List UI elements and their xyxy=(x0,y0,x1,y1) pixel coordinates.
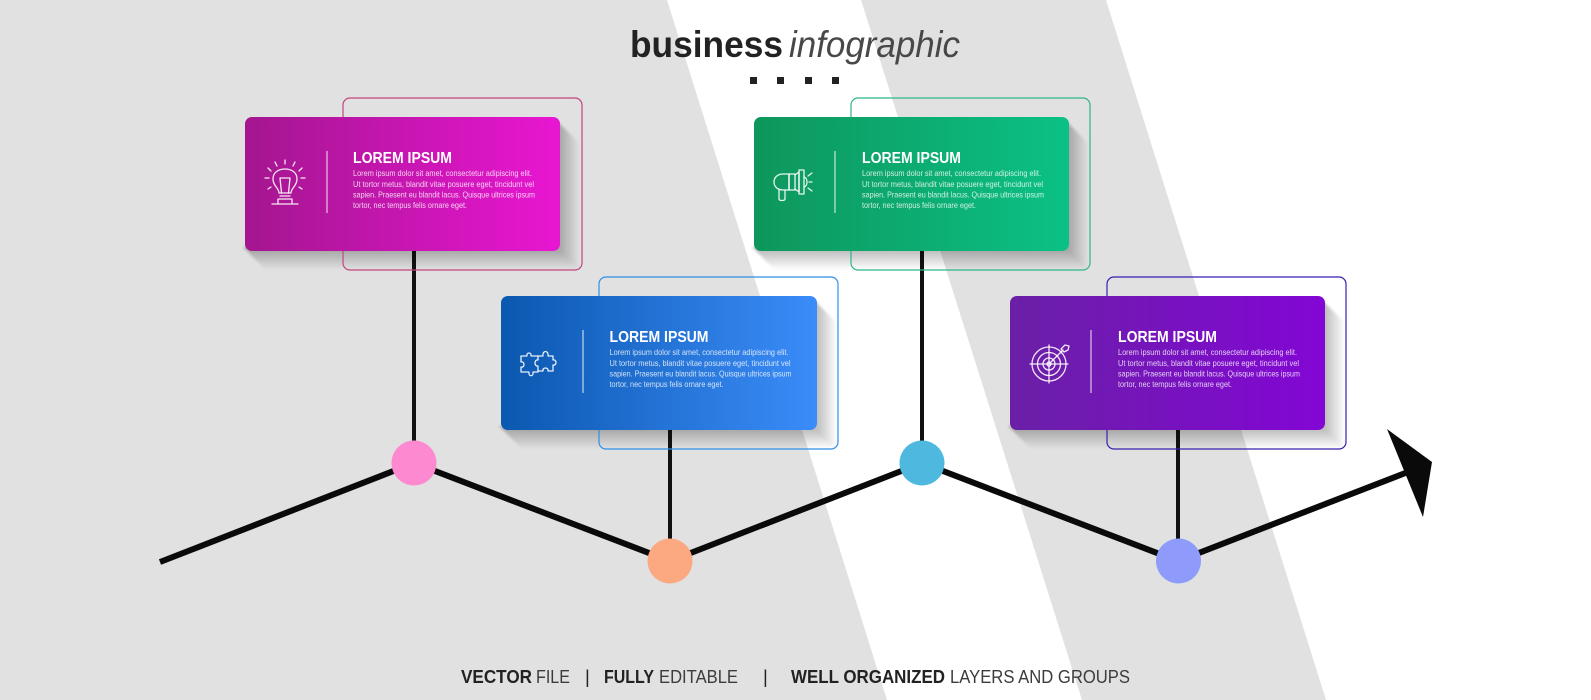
card 3 body text: Ut tortor metus, blandit vitae posuere eget, tincidunt vel xyxy=(862,179,1043,189)
connector: stem 1 xyxy=(412,245,416,463)
card 2 body text: tortor, nec tempus felis ornare eget. xyxy=(610,379,724,389)
card 3 body text: Lorem ipsum dolor sit amet, consectetur adipiscing elit. xyxy=(862,168,1041,178)
card 4 body text: tortor, nec tempus felis ornare eget. xyxy=(1118,379,1232,389)
footer tagline: VECTOR xyxy=(461,666,532,687)
node 3 xyxy=(900,440,944,486)
card 4 body text: Lorem ipsum dolor sit amet, consectetur adipiscing elit. xyxy=(1118,347,1297,357)
footer tagline: | xyxy=(585,666,590,687)
icon: light bulb xyxy=(265,160,305,204)
timeline zigzag line xyxy=(160,463,1408,562)
footer tagline: WELL ORGANIZED xyxy=(791,666,945,687)
card 3 heading: LOREM IPSUM xyxy=(862,150,961,167)
card 4 body text: Ut tortor metus, blandit vitae posuere eget, tincidunt vel xyxy=(1118,358,1299,368)
panel: card 1 xyxy=(243,98,582,270)
connector: stem 3 xyxy=(920,245,924,463)
card 3 body text: sapien. Praesent eu blandit lacus. Quisque ultrices ipsum xyxy=(862,190,1044,200)
card 3 body text xyxy=(862,168,1044,210)
card 2 body text: Lorem ipsum dolor sit amet, consectetur adipiscing elit. xyxy=(610,347,788,357)
card 3 body text: tortor, nec tempus felis ornare eget. xyxy=(862,200,976,210)
title xyxy=(630,24,960,65)
panel: card 3 xyxy=(752,98,1090,270)
card 2 heading: LOREM IPSUM xyxy=(610,329,708,346)
card 4 body text: sapien. Praesent eu blandit lacus. Quisque ultrices ipsum xyxy=(1118,368,1300,378)
card 1 body text: Lorem ipsum dolor sit amet, consectetur adipiscing elit. xyxy=(353,168,532,178)
panel: card 2 xyxy=(499,277,838,449)
title: business xyxy=(630,24,783,65)
card 4 body text xyxy=(1118,347,1300,389)
connector: stem 4 xyxy=(1176,425,1180,561)
title: infographic xyxy=(789,24,960,65)
card 2 body text: Ut tortor metus, blandit vitae posuere eget, tincidunt vel xyxy=(610,358,791,368)
icon: megaphone xyxy=(774,170,812,200)
card 2 body text: sapien. Praesent eu blandit lacus. Quisque ultrices ipsum xyxy=(610,368,792,378)
connector: stem 2 xyxy=(668,425,672,561)
card 1 body text: sapien. Praesent eu blandit lacus. Quisque ultrices ipsum xyxy=(353,190,535,200)
card 4 heading: LOREM IPSUM xyxy=(1118,329,1217,346)
node 1 xyxy=(392,440,436,486)
title dots xyxy=(750,77,839,84)
footer tagline: LAYERS AND GROUPS xyxy=(950,666,1130,687)
card 1 body text xyxy=(353,168,535,210)
card 2 body text xyxy=(610,347,792,389)
footer tagline: FULLY xyxy=(604,666,655,687)
icon: puzzle xyxy=(521,352,556,376)
card 1 body text: Ut tortor metus, blandit vitae posuere eget, tincidunt vel xyxy=(353,179,534,189)
node 2 xyxy=(648,538,692,584)
icon: target xyxy=(1030,345,1069,383)
arrow head xyxy=(1387,429,1432,517)
card 1 body text: tortor, nec tempus felis ornare eget. xyxy=(353,200,467,210)
footer tagline xyxy=(461,666,1130,687)
card 1 heading: LOREM IPSUM xyxy=(353,150,452,167)
panel: card 4 xyxy=(1008,277,1346,449)
footer tagline: | xyxy=(763,666,768,687)
footer tagline: EDITABLE xyxy=(659,666,738,687)
node 4 xyxy=(1156,538,1201,584)
footer tagline: FILE xyxy=(536,666,570,687)
